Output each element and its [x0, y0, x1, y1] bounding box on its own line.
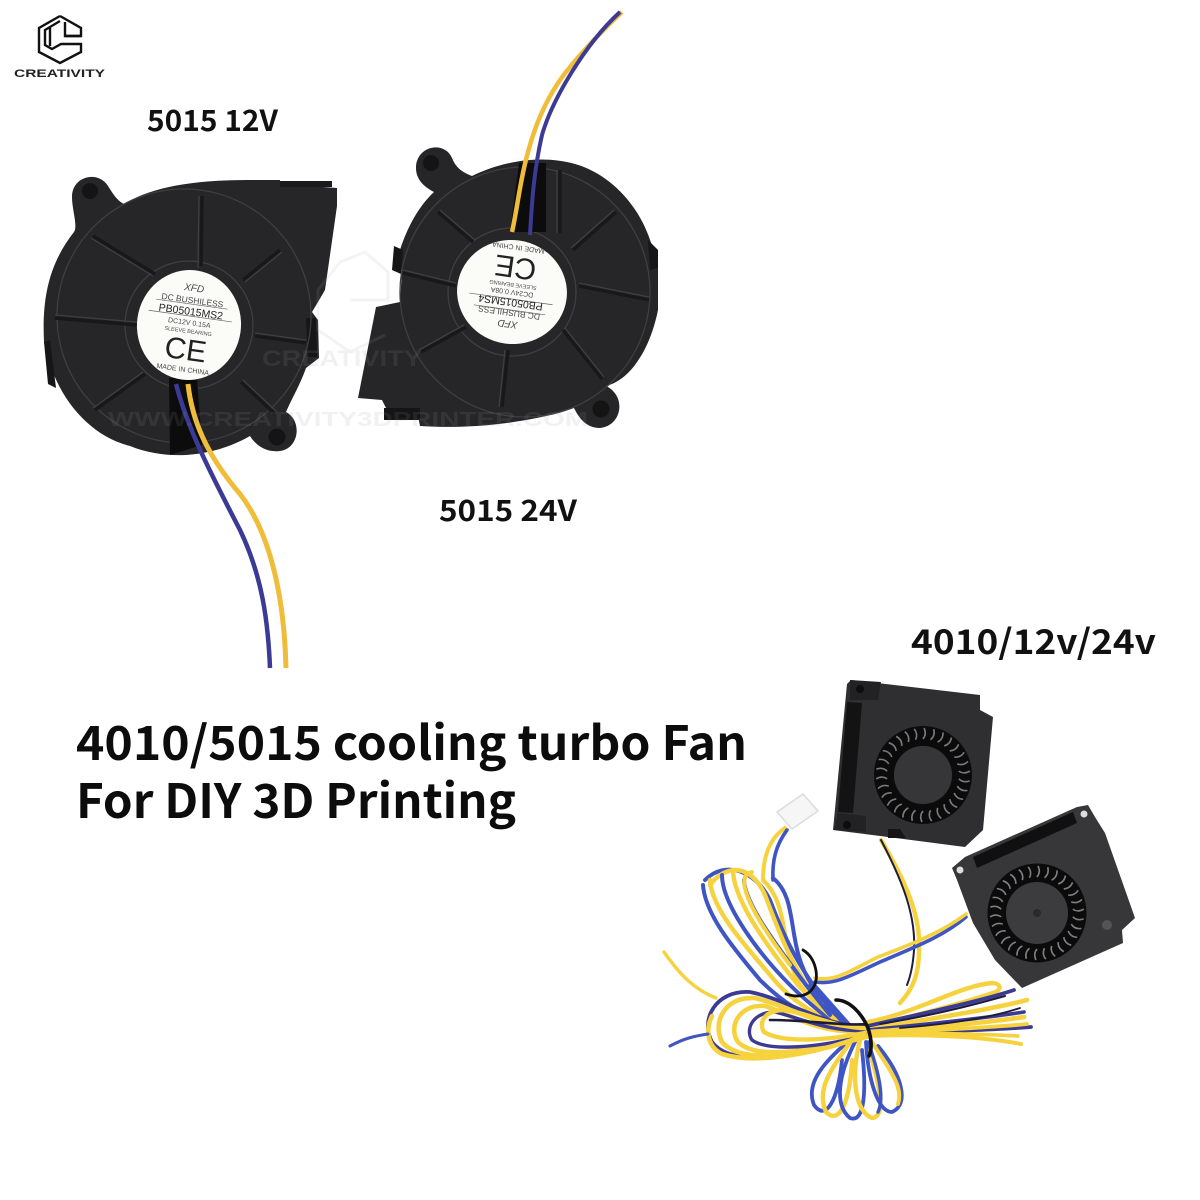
cable ties — [786, 950, 816, 996]
watermark: CREATIVITY — [262, 346, 422, 371]
fan 24V vane lines — [400, 167, 650, 417]
watermark — [108, 252, 588, 431]
fan 12V label: SLEEVE BEARING — [164, 326, 212, 338]
fan 12V wires — [176, 384, 270, 668]
fan 24V label: DC BUSHILESS — [477, 303, 541, 322]
fan 24V label: SLEEVE BEARING — [489, 278, 537, 290]
fan 12V housing — [44, 177, 337, 455]
title — [76, 705, 747, 832]
fan 12V label — [130, 263, 248, 387]
lower loops — [812, 1040, 850, 1111]
fan 12V label: DC BUSHILESS — [161, 291, 224, 310]
rotor — [876, 728, 970, 822]
fan: 5015 12V — [44, 177, 337, 668]
fan 12V vane lines — [55, 189, 311, 443]
fan: 5015 24V — [358, 12, 658, 428]
fan 24V label — [450, 233, 574, 351]
title: 4010/5015 cooling turbo Fan — [76, 705, 747, 774]
fan 12V label: DC12V 0.15A — [168, 317, 211, 330]
heading: 5015 12V: 5015 12V — [147, 98, 279, 140]
connector — [777, 794, 818, 829]
fan 12V label: MADE IN CHINA — [156, 363, 210, 377]
wire slot — [169, 378, 202, 455]
title: For DIY 3D Printing — [76, 763, 516, 832]
logo: Creativity: CREATIVITY — [14, 68, 106, 80]
left knot loop — [708, 992, 870, 1058]
loose ends — [664, 952, 716, 998]
right fan strands — [868, 983, 1000, 1026]
fan 24V label: XFD — [497, 316, 519, 330]
watermark: WWW.CREATIVITY3DPRINTER.COM — [108, 409, 588, 431]
heading: 5015 24V: 5015 24V — [439, 488, 578, 530]
logo: Creativity — [14, 16, 106, 80]
rotor — [990, 866, 1084, 960]
fan 24V label: PB05015MS4 — [478, 291, 544, 312]
upper loop strands — [763, 880, 825, 1015]
wire bundle — [664, 828, 1031, 1119]
fan 12V label: XFD — [182, 282, 205, 296]
fan 12V label: PB05015MS2 — [158, 302, 224, 323]
wire from upper fan — [881, 840, 919, 1003]
fan 12V label: CE — [163, 331, 208, 369]
heading: 4010/12v/24v: 4010/12v/24v — [911, 615, 1156, 664]
fan 24V label: CE — [493, 248, 538, 286]
connector leads — [763, 828, 785, 880]
wire from lower fan — [815, 917, 966, 983]
fan 24V label: MADE IN CHINA — [491, 240, 545, 254]
fan 24V label: DC24V 0.08A — [490, 285, 534, 298]
fan: 4010 upper — [833, 680, 993, 847]
fan: 4010 lower — [952, 805, 1135, 988]
fan 24V wires — [512, 12, 622, 232]
wire slot — [510, 163, 546, 232]
fan 24V housing — [358, 147, 658, 428]
